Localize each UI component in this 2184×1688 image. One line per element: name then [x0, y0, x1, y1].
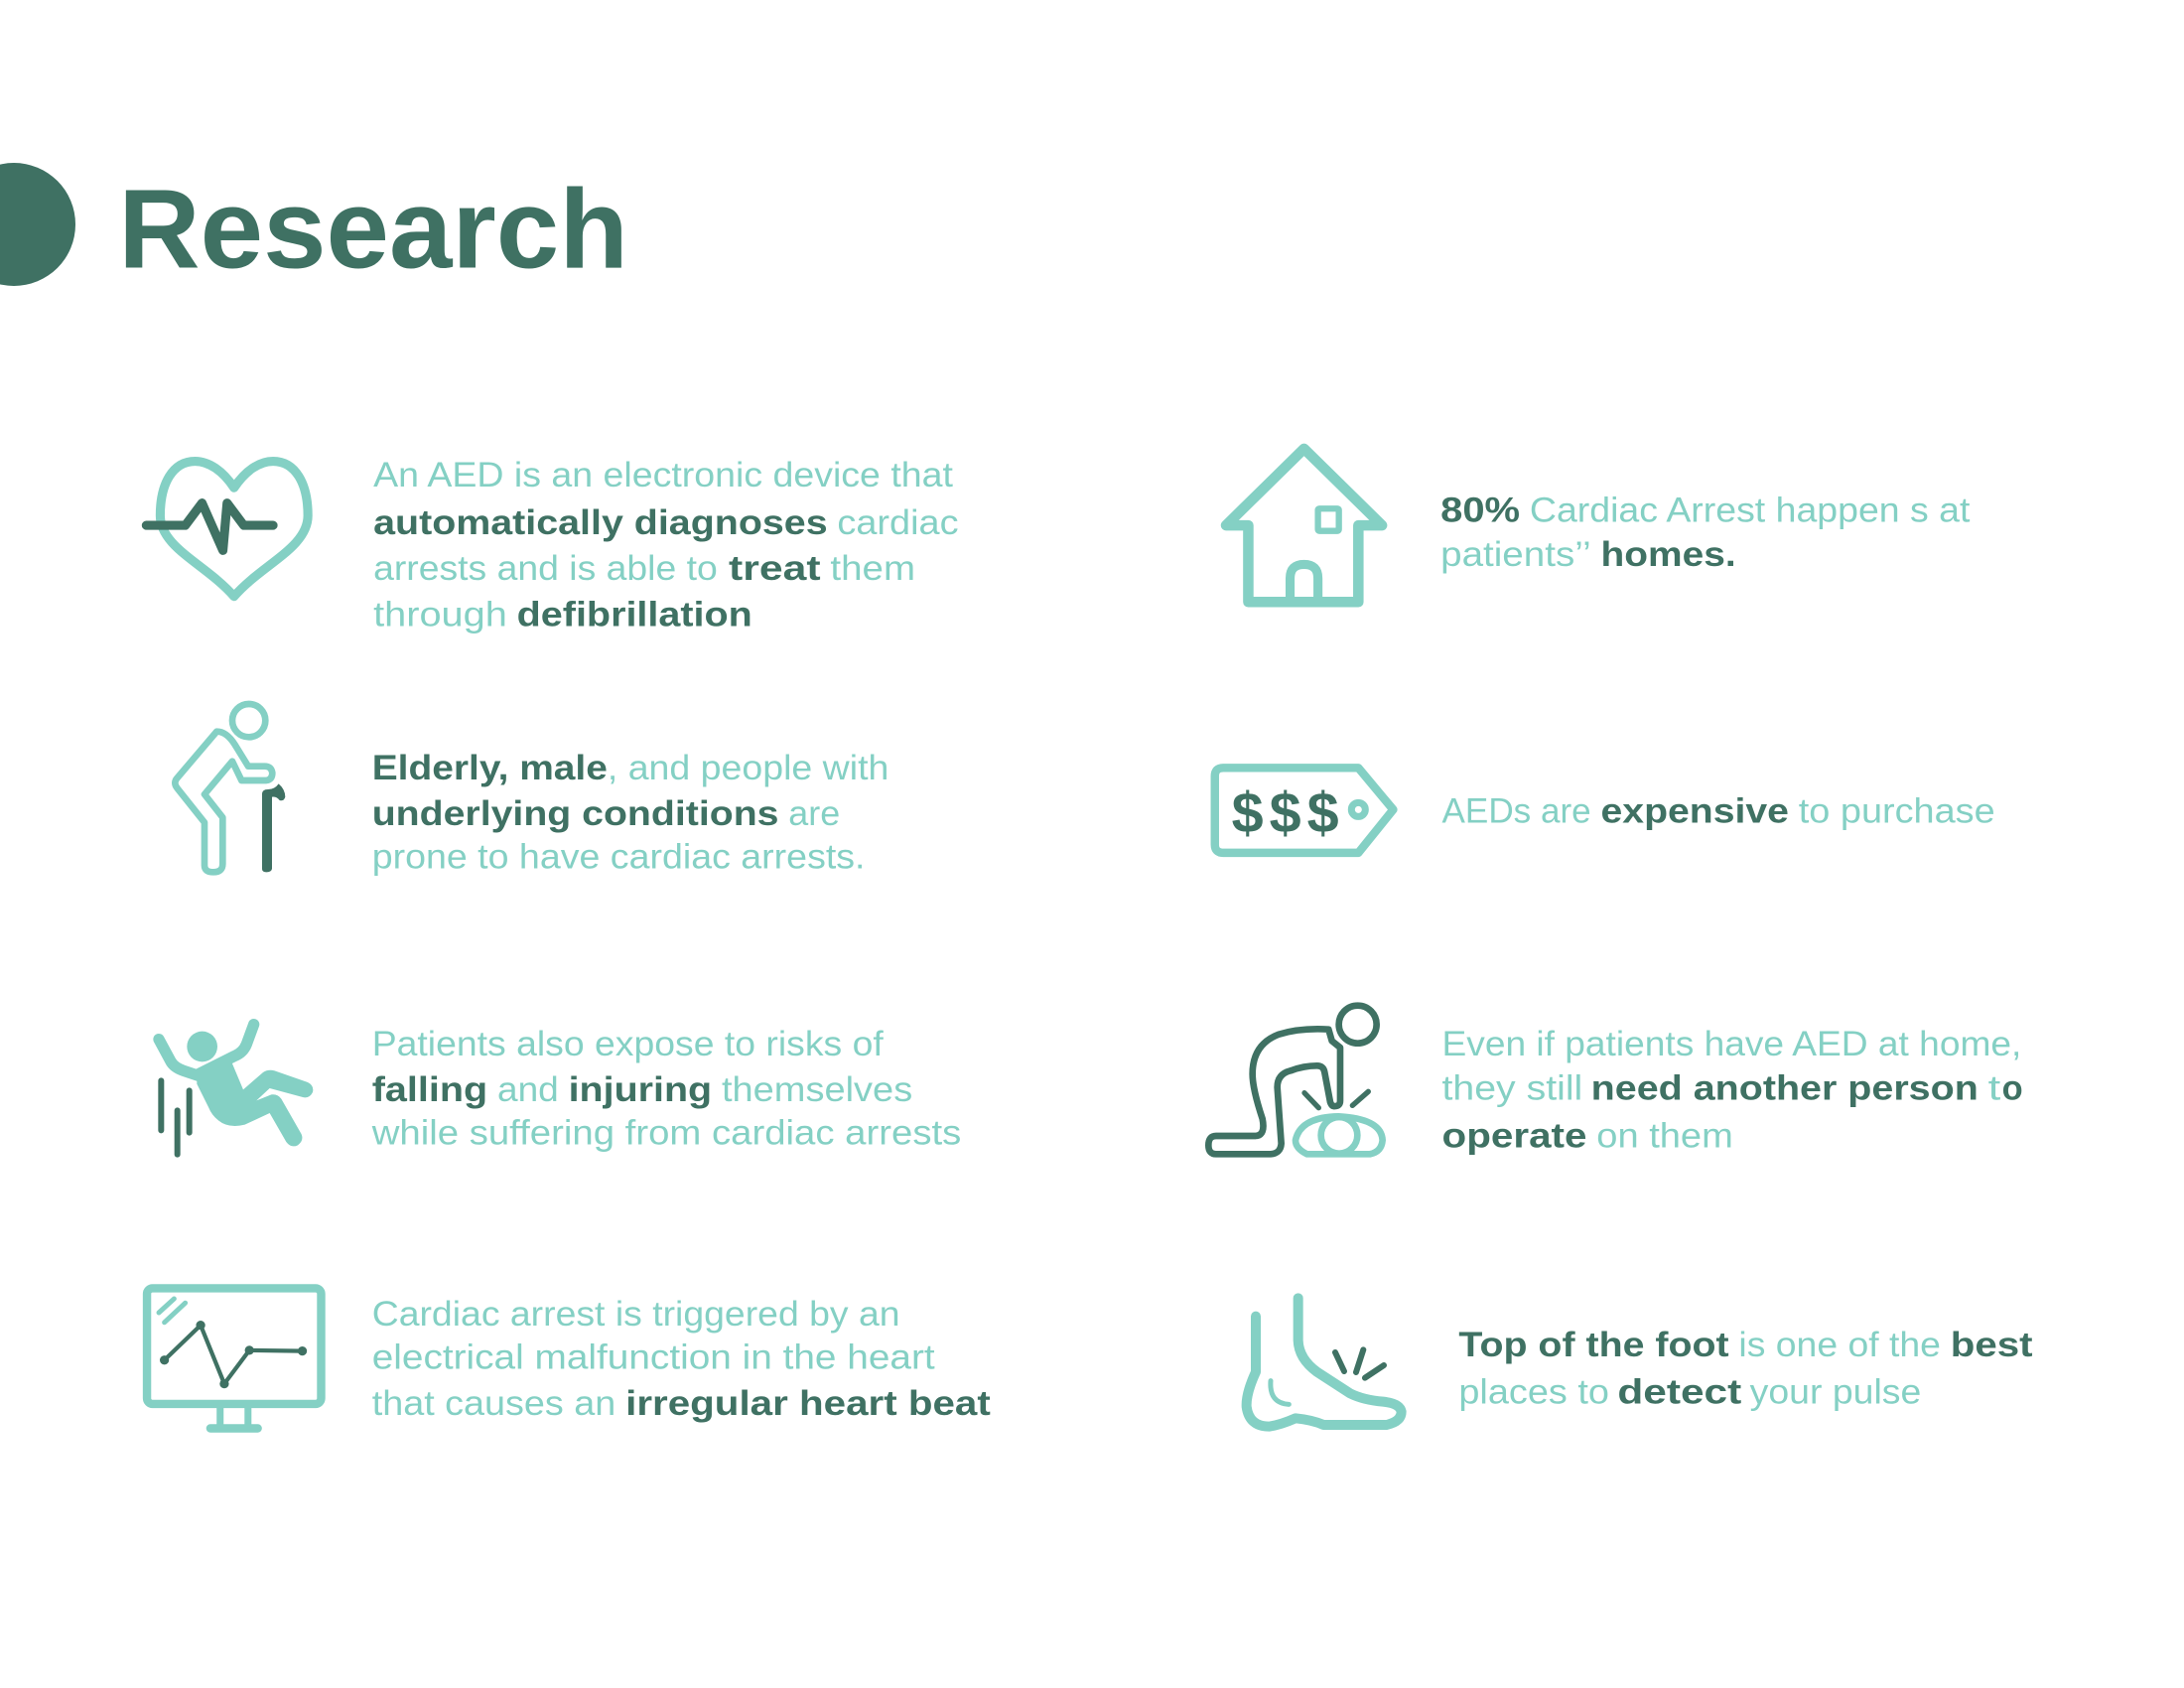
text: AED cost: [1442, 791, 1995, 830]
text: at-risk people: Elderly, male: [372, 749, 608, 787]
panel: AED cost: [1215, 768, 1995, 853]
text: arrests at home: patients’’: [1440, 535, 1591, 574]
text: falling risk: themselves: [722, 1070, 912, 1109]
text: arrests at home: homes.: [1601, 535, 1736, 574]
icon: falling person: [159, 1025, 313, 1155]
icon: foot: [1247, 1298, 1402, 1427]
icon: price tag: [1215, 768, 1393, 853]
text: falling risk: and: [497, 1070, 559, 1109]
text: AED cost: to purchase: [1799, 791, 1995, 830]
text: cardiac arrest cause: irregular heart beat: [625, 1384, 991, 1423]
text: falling risk: injuring: [569, 1070, 712, 1109]
text: falling risk: [371, 1025, 961, 1153]
text: at-risk people: prone to have cardiac arrests.: [372, 838, 866, 877]
text: AED definition: An AED is an electronic device that: [373, 456, 953, 494]
title marker circle: [0, 163, 75, 286]
text: pulse location: places to: [1458, 1373, 1609, 1412]
text: cardiac arrest cause: that causes an: [372, 1384, 615, 1423]
text: AED definition: defibrillation: [517, 596, 752, 634]
text: needs another person: operate: [1442, 1116, 1586, 1155]
text: pulse location: Top of the foot: [1458, 1326, 1729, 1364]
text: at-risk people: are: [788, 794, 840, 833]
panel: falling risk: [159, 1025, 961, 1155]
text: falling risk: falling: [372, 1070, 487, 1109]
text: pulse location: your pulse: [1750, 1373, 1921, 1412]
text: arrests at home: 80%: [1440, 491, 1520, 529]
text: cardiac arrest cause: Cardiac arrest is triggered by an: [372, 1295, 900, 1334]
text: needs another person: o: [2002, 1069, 2023, 1108]
panel: AED definition: [146, 456, 959, 634]
text: pulse location: best: [1951, 1326, 2033, 1364]
text: AED definition: cardiac: [837, 503, 959, 542]
text: AED definition: through: [373, 596, 507, 634]
text: AED cost: AEDs are: [1442, 791, 1591, 830]
text: needs another person: [1442, 1025, 2023, 1155]
icon: monitor with chart: [147, 1288, 321, 1428]
panel: at-risk people: [175, 704, 888, 877]
text: needs another person: they still: [1442, 1069, 1582, 1108]
icon: house: [1226, 449, 1382, 602]
text: needs another person: need another person: [1591, 1069, 1979, 1108]
text: arrests at home: [1440, 491, 1971, 574]
text: AED definition: automatically diagnoses: [373, 503, 828, 542]
icon: heart with pulse: [146, 462, 308, 597]
text: pulse location: is one of the: [1738, 1326, 1941, 1364]
text: at-risk people: , and people with: [608, 749, 888, 787]
text: AED definition: them: [830, 549, 915, 588]
icon: price tag: $$$: [1232, 781, 1339, 845]
panel: needs another person: [1208, 1006, 2023, 1155]
text: at-risk people: [372, 749, 888, 877]
text: arrests at home: Cardiac Arrest happen s at: [1530, 491, 1971, 529]
text: needs another person: t: [1988, 1069, 2001, 1108]
text: AED definition: treat: [729, 549, 821, 588]
text: falling risk: while suffering from cardiac arrests: [371, 1114, 961, 1153]
text: needs another person: on them: [1596, 1116, 1733, 1155]
text: AED cost: expensive: [1601, 791, 1789, 830]
panel: arrests at home: [1226, 449, 1971, 602]
text: pulse location: [1458, 1326, 2033, 1412]
text: pulse location: detect: [1617, 1373, 1742, 1412]
panel: cardiac arrest cause: [147, 1288, 991, 1428]
text: needs another person: Even if patients have AED at home,: [1442, 1025, 2021, 1063]
icon: CPR: [1208, 1006, 1383, 1154]
text: cardiac arrest cause: [372, 1295, 991, 1423]
text: falling risk: Patients also expose to risks of: [372, 1025, 884, 1063]
text: at-risk people: underlying conditions: [372, 794, 779, 833]
icon: elderly person with cane: [175, 704, 285, 872]
text: AED definition: [373, 456, 959, 634]
panel: pulse location: [1247, 1298, 2033, 1427]
text: cardiac arrest cause: electrical malfunction in the heart: [372, 1338, 935, 1377]
title: Research: [118, 166, 628, 292]
text: AED definition: arrests and is able to: [373, 549, 718, 588]
